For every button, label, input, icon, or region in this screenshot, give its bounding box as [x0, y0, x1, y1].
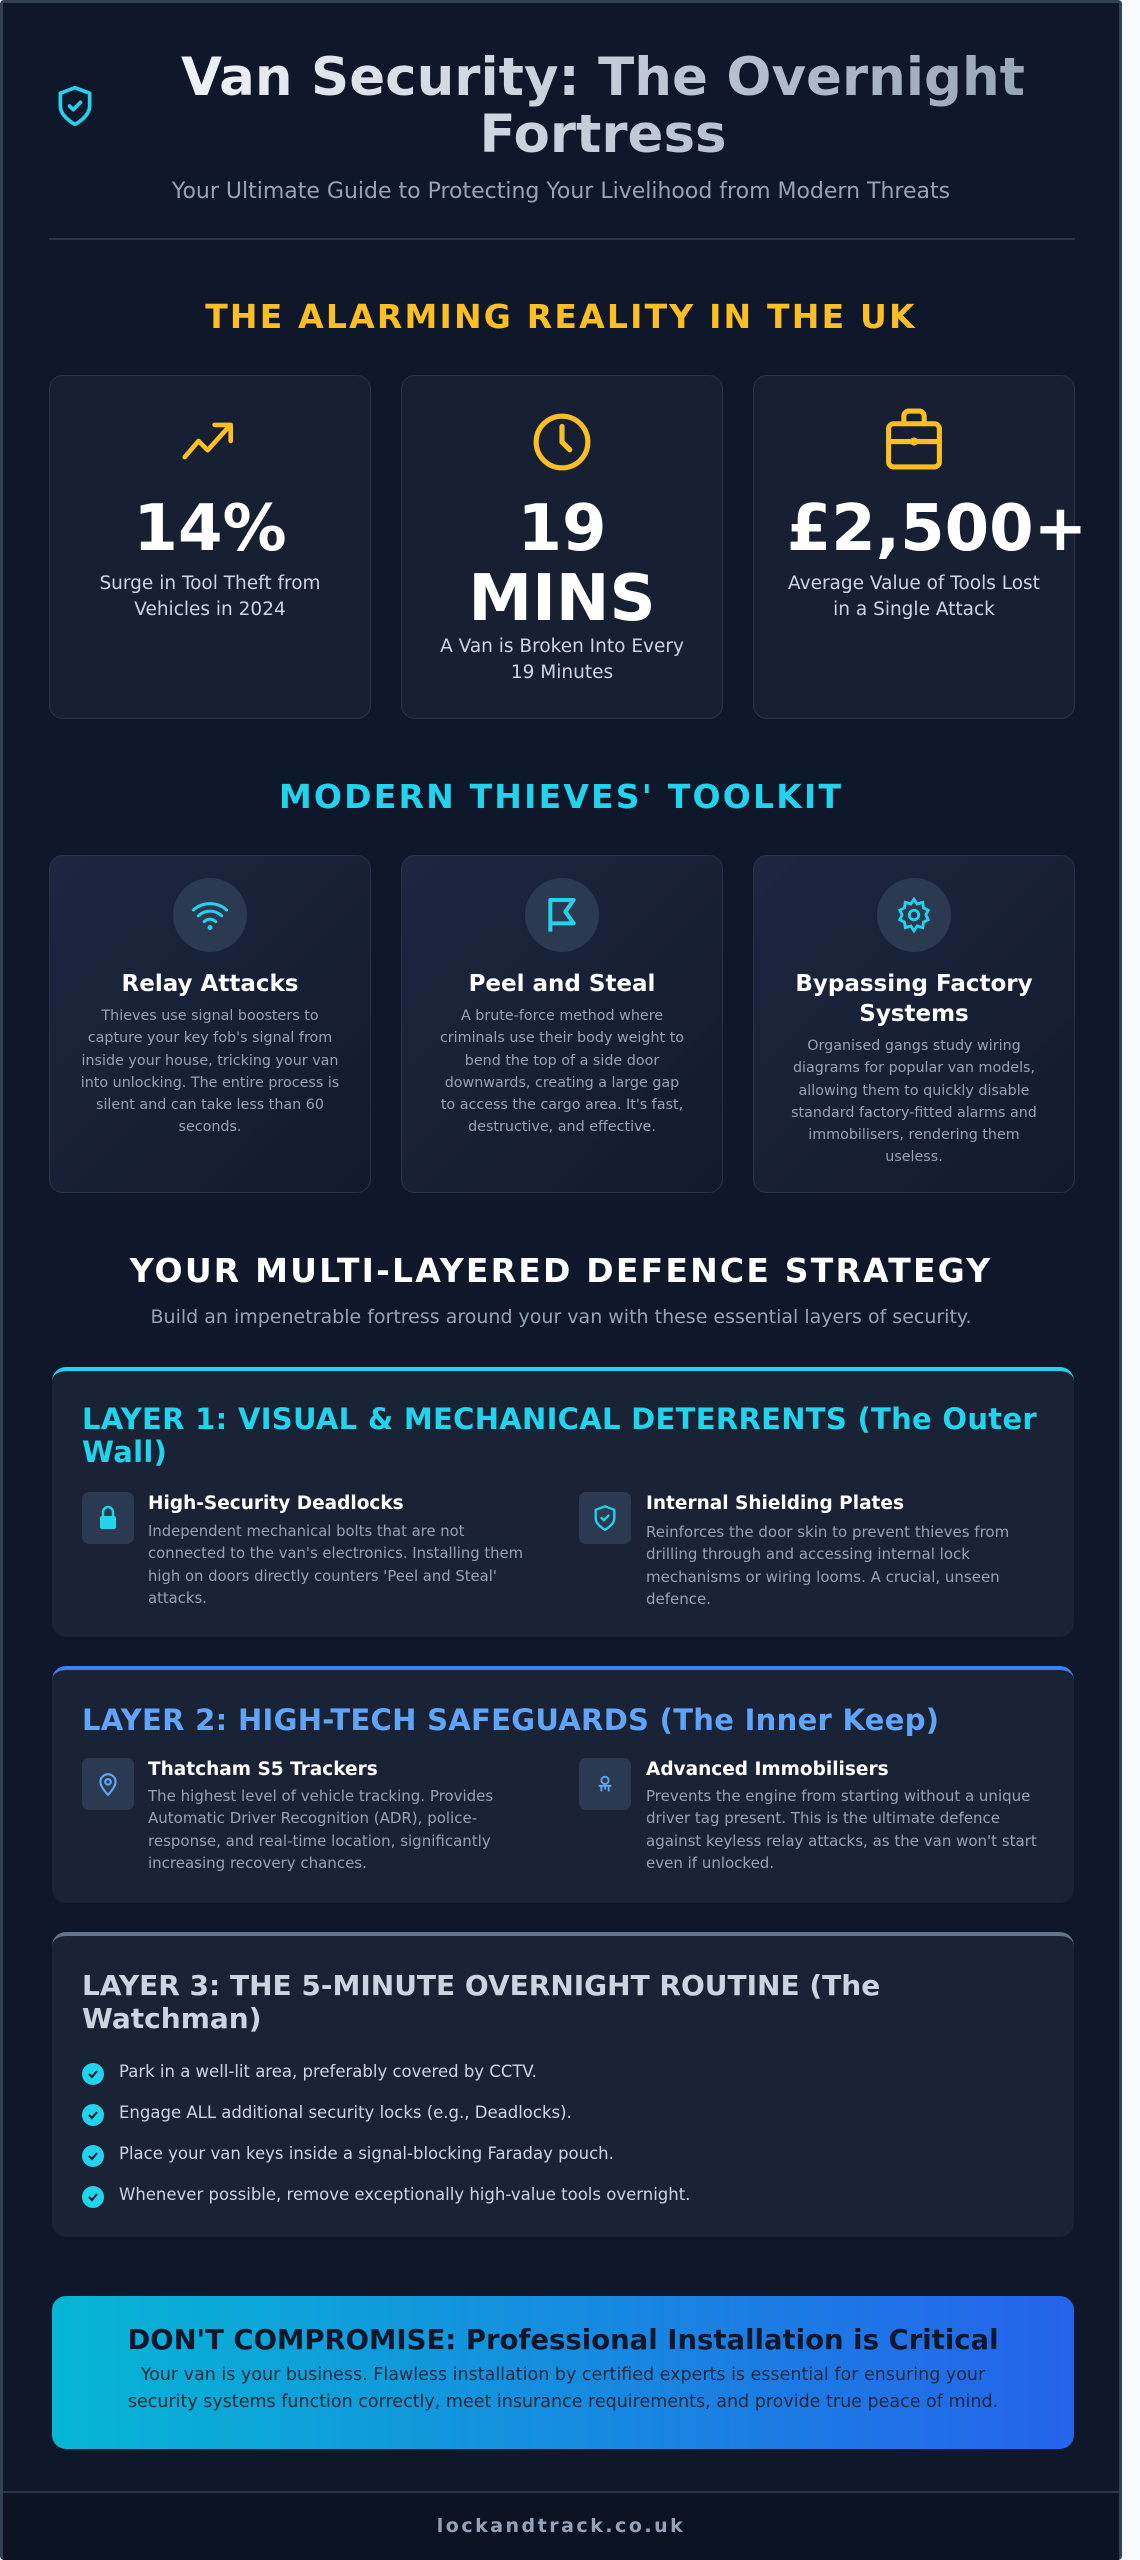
subtitle: Your Ultimate Guide to Protecting Your Livelihood from Modern Threats — [172, 179, 950, 204]
callout: professional installation — [52, 2296, 1074, 2449]
icon: location pin — [82, 1758, 134, 1810]
panel: layer 1: LAYER 1: VISUAL & MECHANICAL DETERRENTS (The Outer Wall) — [82, 1402, 1037, 1469]
panel: layer 2: Thatcham S5 Trackers — [148, 1759, 378, 1780]
panel: relay attacks — [49, 855, 371, 1193]
panel: peel and steal — [401, 855, 723, 1193]
stat card 2: A Van is Broken Into Every — [440, 636, 684, 657]
icon: lock — [82, 1492, 134, 1544]
panel: bypassing: Systems — [859, 1001, 969, 1027]
stat card 1: Surge in Tool Theft from — [99, 573, 321, 594]
panel: relay attacks: Thieves use signal boosters to capture your key fob's signal from inside your house, tricking your van into unlocking. The entire process is silent and can take less than 60 seconds. — [81, 1008, 339, 1135]
stat card 1 — [49, 375, 371, 719]
stat card 1: 14% — [133, 492, 287, 566]
panel: layer 1: High-Security Deadlocks — [148, 1493, 404, 1514]
stat card 2: 19 Minutes — [511, 662, 613, 683]
icon: shield — [579, 1492, 631, 1544]
panel: peel and steal: Peel and Steal — [469, 971, 655, 997]
checklist: Engage ALL additional security locks (e.g., Deadlocks). — [119, 2103, 572, 2122]
stat card 2: 19 — [517, 492, 607, 566]
icon: gear — [877, 878, 951, 952]
icon: immobiliser — [579, 1758, 631, 1810]
icon: wifi — [173, 878, 247, 952]
panel: layer 2 — [52, 1666, 1074, 1903]
icon: briefcase — [886, 408, 942, 470]
panel: layer 1: Internal Shielding Plates — [646, 1493, 904, 1514]
icon: shield — [58, 86, 92, 126]
panel: layer 1: Reinforces the door skin to prevent thieves from drilling through and accessing internal lock mechanisms or wiring looms. A crucial, unseen defence. — [646, 1523, 1009, 1608]
heading: alarming reality: THE ALARMING REALITY IN THE UK — [205, 297, 917, 336]
title: Van Security: The Overnight Fortress — [181, 47, 1025, 165]
heading: defence strategy: YOUR MULTI-LAYERED DEFENCE STRATEGY — [130, 1251, 992, 1290]
panel: layer 2: LAYER 2: HIGH-TECH SAFEGUARDS (The Inner Keep) — [82, 1703, 939, 1737]
panel: layer 2: Advanced Immobilisers — [646, 1759, 889, 1780]
stat card 3: £2,500+ — [787, 492, 1087, 566]
stat card 2: MINS — [468, 562, 656, 636]
stat card 3 — [753, 375, 1075, 719]
stat card 1: Vehicles in 2024 — [134, 599, 286, 620]
heading: toolkit: MODERN THIEVES' TOOLKIT — [279, 777, 843, 816]
panel: layer 1 — [52, 1367, 1074, 1637]
icon: flag — [525, 878, 599, 952]
icon: clock — [534, 414, 590, 470]
panel: bypassing — [753, 855, 1075, 1193]
panel: layer 3 — [52, 1932, 1074, 2237]
panel: bypassing: Bypassing Factory — [795, 971, 1033, 997]
footer — [3, 2493, 1119, 2560]
stat card 2 — [401, 375, 723, 719]
checklist: Place your van keys inside a signal-blocking Faraday pouch. — [119, 2144, 614, 2163]
panel: layer 2: The highest level of vehicle tracking. Provides Automatic Driver Recognition (ADR), police-response, and real-time location, significantly increasing recovery chances. — [148, 1787, 493, 1872]
stat card 3: in a Single Attack — [833, 599, 995, 620]
checklist: Whenever possible, remove exceptionally high-value tools overnight. — [119, 2185, 690, 2204]
icon: trending up — [182, 422, 233, 460]
panel: relay attacks: Relay Attacks — [122, 971, 298, 997]
checklist — [82, 2062, 690, 2208]
panel: peel and steal: A brute-force method where criminals use their body weight to bend the top of a side door downwards, creating a large gap to access the cargo area. It's fast, destructive, and effective. — [440, 1008, 684, 1135]
panel: layer 2: Prevents the engine from starting without a unique driver tag present. This is the ultimate defence against keyless relay attacks, as the van won't start even if unlocked. — [646, 1787, 1037, 1872]
checklist: Park in a well-lit area, preferably covered by CCTV. — [119, 2062, 537, 2081]
callout: professional installation: Your van is your business. Flawless installation by certified experts is essential for ensuring your security systems function correctly, meet insurance requirements, and provide true peace of mind. — [128, 2365, 998, 2412]
callout: professional installation: DON'T COMPROMISE: Professional Installation is Critical — [127, 2324, 999, 2356]
panel: layer 1: Independent mechanical bolts that are not connected to the van's electronics. Installing them high on doors directly counters 'Peel and Steal' attacks. — [148, 1523, 523, 1607]
text: defence subtitle: Build an impenetrable fortress around your van with these essential layers of security. — [150, 1306, 972, 1328]
stat card 3: Average Value of Tools Lost — [788, 573, 1040, 594]
footer: lockandtrack.co.uk — [437, 2515, 685, 2537]
panel: layer 3: LAYER 3: THE 5-MINUTE OVERNIGHT ROUTINE (The Watchman) — [82, 1969, 880, 2035]
panel: bypassing: Organised gangs study wiring diagrams for popular van models, allowing them to quickly disable standard factory-fitted alarms and immobilisers, rendering them useless. — [791, 1038, 1037, 1165]
